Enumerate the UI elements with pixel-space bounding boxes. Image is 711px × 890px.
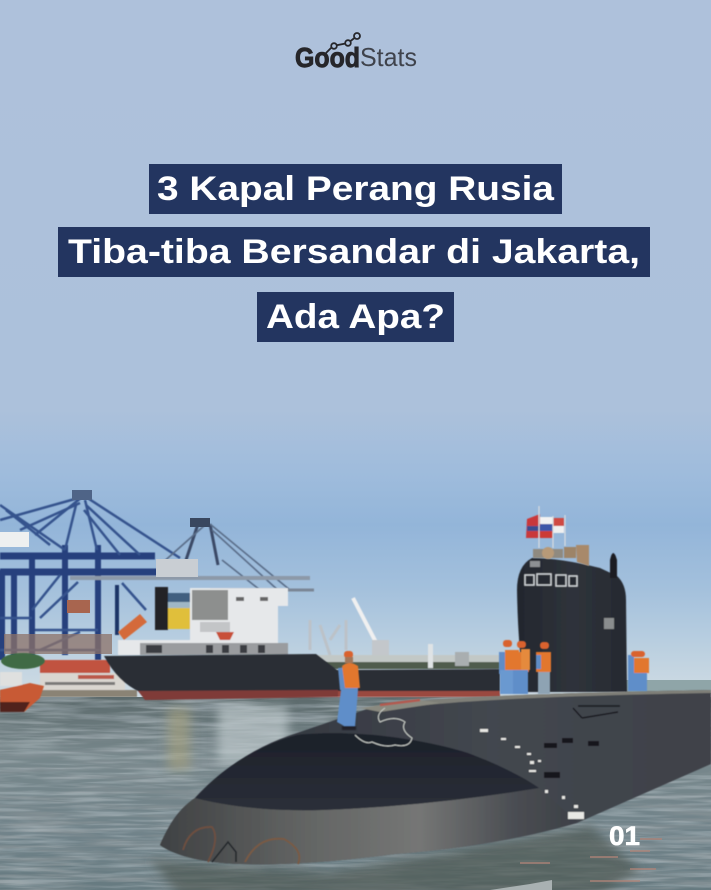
logo wordmark: Good [295,42,360,73]
deck hatches [544,738,599,778]
ship superstructure [118,587,288,655]
ripples dark [0,697,711,890]
funnel [155,587,168,630]
crew on tower [533,545,589,566]
lifeboat [118,614,147,640]
title line 1: 3 Kapal Perang Rusia [157,170,555,208]
logo wordmark light part: Stats [360,42,417,72]
snorkel [610,553,617,578]
title [58,164,650,342]
logo chart line icon [326,33,360,53]
dark dome of bow [195,733,539,810]
stacked containers [4,634,112,654]
title line 3: Ada Apa? [266,298,445,336]
crane white box [0,532,29,547]
flags [526,506,565,548]
container cranes [0,497,314,660]
background crane and port [290,598,500,669]
submarine conning tower [517,553,627,692]
cargo ship hull [104,654,500,700]
port buildings and trees [0,653,137,697]
title line 3 [257,292,454,342]
logo: GoodStats [295,33,417,73]
lower band of bow [160,788,578,864]
crew: group left of tower [499,640,551,694]
page number: 01 [609,821,640,851]
crane machinery head [72,490,92,500]
photo: harbour scene [0,490,711,890]
ripples light [0,697,711,890]
title line 2: Tiba-tiba Bersandar di Jakarta, [68,233,640,271]
submarine hull [160,690,711,864]
red reflection streaks [520,838,662,882]
title line 2 [58,227,650,277]
crew: group right of tower [628,651,649,691]
water reflections [0,697,711,890]
waterline marks [183,827,215,862]
tower windows [525,574,577,586]
deck lighter strip [373,690,711,708]
hanging container [67,600,90,613]
title line 1 [149,164,562,214]
crane cab [156,559,198,577]
reflection patches [150,706,640,890]
mooring rope [355,708,412,746]
water [0,697,711,890]
crew: standing on the bow [337,651,360,730]
foam patch [490,880,552,890]
deck rivets [480,729,584,819]
tugboat [0,672,44,712]
distant shore [625,680,711,694]
